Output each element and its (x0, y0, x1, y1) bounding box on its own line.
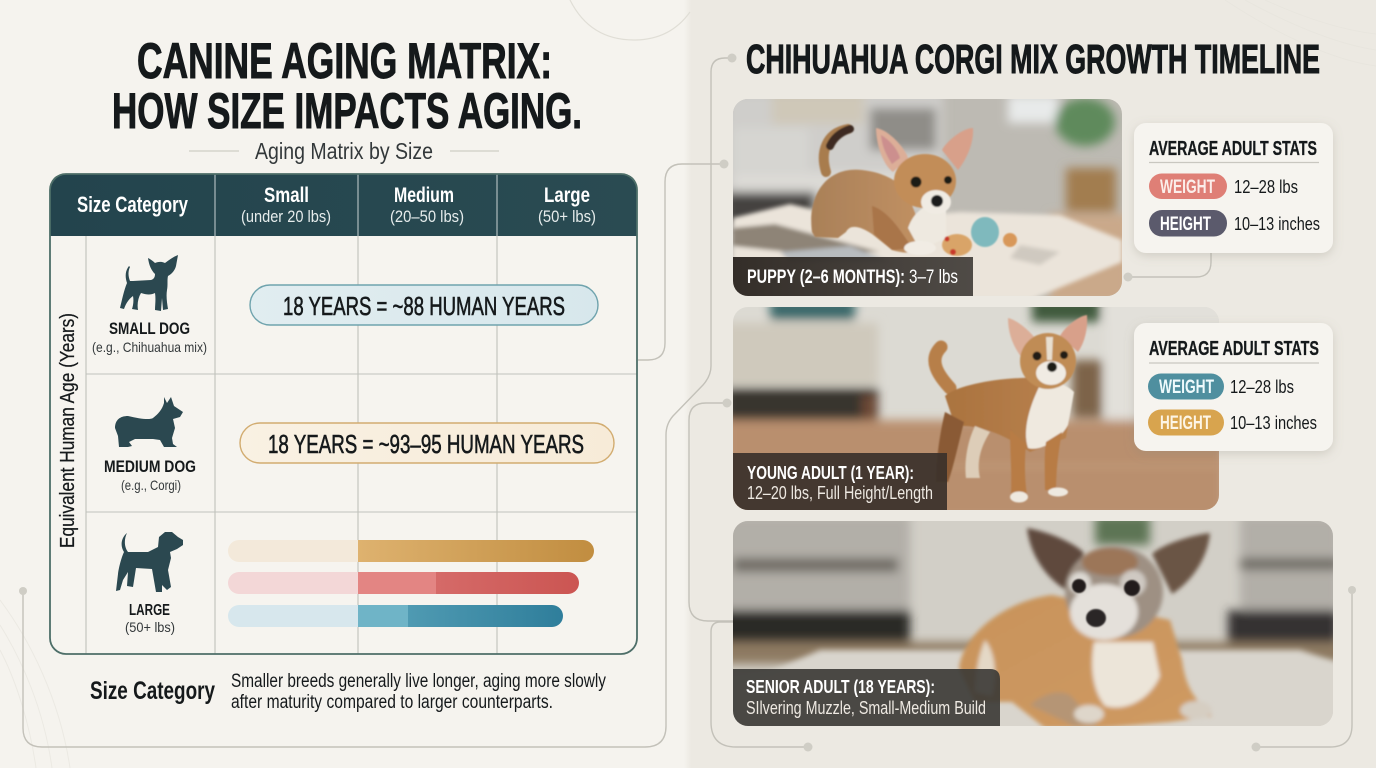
table header: Small (264, 184, 309, 207)
text block: size category note (90, 671, 606, 713)
bar: blue (228, 605, 563, 627)
table header: Large (544, 184, 590, 207)
title: canine aging matrix: CANINE AGING MATRIX: (137, 33, 552, 89)
connector: bottom left to photo two (19, 54, 736, 747)
text block: size category note: Size Category (90, 677, 215, 705)
icon: large dog silhouette (116, 532, 183, 592)
label: small dog: (e.g., Chihuahua mix) (92, 339, 207, 355)
caption: young adult (733, 453, 947, 510)
table header: (50+ lbs) (538, 207, 596, 226)
stat: height: 10–13 inches (1230, 412, 1317, 433)
label: medium dog (104, 458, 196, 493)
caption: young adult: 12–20 lbs, Full Height/Length (747, 483, 933, 503)
panel: aging matrix table (50, 174, 637, 654)
panel: puppy photo (733, 99, 1122, 296)
table header: (20–50 lbs) (390, 207, 464, 226)
label: large: LARGE (129, 602, 170, 619)
subtitle: aging matrix by size: Aging Matrix by Size (255, 138, 433, 164)
label: medium dog: MEDIUM DOG (104, 458, 196, 476)
caption: senior adult: SIlvering Muzzle, Small-Medium Build (746, 698, 986, 718)
panel: young adult photo (733, 307, 1219, 510)
table header (50, 174, 637, 236)
background: left panel (0, 0, 690, 768)
bar chart: large dog aging bars (228, 540, 594, 627)
card: average adult stats two (1134, 323, 1333, 451)
stat: weight (1149, 174, 1298, 199)
card: average adult stats one (1134, 123, 1333, 253)
bar: gold (228, 540, 594, 562)
label: small dog: SMALL DOG (109, 320, 190, 338)
text block: size category note: after maturity compared to larger counterparts. (231, 692, 553, 713)
panel: senior adult photo (733, 521, 1333, 726)
stat: height (1148, 410, 1317, 436)
stat: weight (1148, 374, 1294, 400)
stat: height: HEIGHT (1160, 214, 1211, 235)
caption: puppy: PUPPY (2–6 MONTHS): (747, 267, 905, 288)
table header: Medium (394, 184, 454, 207)
title: canine aging matrix (112, 33, 582, 139)
caption: senior adult: SENIOR ADULT (18 YEARS): (746, 676, 935, 697)
stat: height (1149, 210, 1320, 236)
stat: height: 10–13 inches (1234, 213, 1320, 234)
caption: young adult: YOUNG ADULT (1 YEAR): (747, 462, 914, 483)
stat: weight: 12–28 lbs (1230, 376, 1294, 397)
callout: small dog result pill (250, 285, 598, 325)
callout: small dog result pill: 18 YEARS = ~88 HUMAN YEARS (283, 291, 565, 321)
connector: young adult photo (689, 398, 733, 621)
text block: size category note: Smaller breeds generally live longer, aging more slowly (231, 671, 606, 692)
connector: table to puppy photo (638, 160, 728, 360)
stat: weight: WEIGHT (1160, 177, 1215, 198)
callout: medium dog result pill: 18 YEARS = ~93–95 HUMAN YEARS (268, 429, 584, 459)
stat: height: HEIGHT (1160, 413, 1211, 434)
caption: senior adult (733, 669, 1000, 726)
connector: senior photo bottom left (711, 622, 812, 752)
title: canine aging matrix: HOW SIZE IMPACTS AGING. (112, 83, 582, 139)
label: medium dog: (e.g., Corgi) (121, 477, 181, 493)
background: right panel (688, 0, 1376, 768)
stat: weight: WEIGHT (1159, 377, 1214, 398)
axis label: equivalent human age: Equivalent Human Age (Years) (57, 313, 79, 548)
table header: (under 20 lbs) (241, 207, 331, 226)
caption: puppy (733, 257, 973, 296)
label: small dog (92, 320, 207, 355)
table header: Size Category (77, 192, 189, 217)
connector: senior photo bottom right (1252, 586, 1356, 752)
icon: medium dog silhouette (115, 397, 183, 447)
caption: puppy: 3–7 lbs (909, 267, 958, 288)
bar: red (228, 572, 579, 594)
label: large: (50+ lbs) (125, 619, 175, 635)
icon: small dog silhouette (120, 255, 178, 311)
connector: stats card to puppy photo (1124, 253, 1211, 282)
callout: medium dog result pill (240, 423, 614, 463)
stat: weight: 12–28 lbs (1234, 176, 1298, 197)
label: large (125, 602, 175, 635)
